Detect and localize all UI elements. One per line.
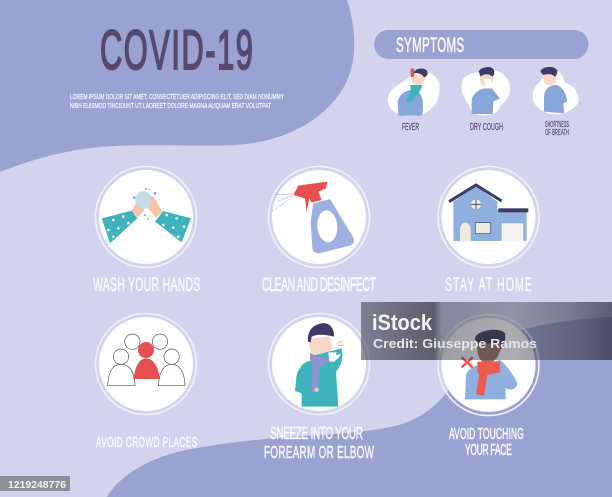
label: clean and desinfect: CLEAN AND DESINFECT — [262, 275, 376, 296]
circle: wash your hands — [96, 166, 196, 268]
circle: clean and desinfect — [268, 166, 370, 268]
icon: house — [449, 185, 528, 242]
label: sneeze into your forearm or elbow: SNEEZE INTO YOUR — [270, 424, 363, 444]
intro text: NIBH EUISMOD TINCIDUNT UT LAOREET DOLORE MAGNA ALIQUAM ERAT VOLUTPAT — [70, 101, 271, 110]
circle: stay at home — [438, 166, 539, 268]
symptom: dry cough — [462, 67, 510, 116]
symptom: shortness of breath — [533, 67, 578, 114]
label: avoid touching your face: AVOID TOUCHING — [449, 425, 524, 443]
text: SHORTNESS — [545, 119, 569, 129]
circle: avoid touching face — [438, 314, 539, 416]
icon: spray bottle — [272, 182, 354, 253]
circle: sneeze — [268, 314, 370, 414]
label: avoid crowd places: AVOID CROWD PLACES — [96, 433, 197, 451]
icon: person touching face — [462, 330, 517, 399]
label: shortness of breath — [545, 119, 569, 137]
text: FEVER — [402, 121, 419, 133]
label: avoid touching your face: YOUR FACE — [465, 441, 512, 459]
label: dry cough: DRY COUGH — [470, 121, 503, 133]
label: shortness of breath: OF BREATH — [545, 127, 569, 137]
watermark: iStock credit: Credit: Giuseppe Ramos — [373, 336, 537, 351]
circle: avoid crowd places — [96, 314, 196, 414]
label: sneeze into your forearm or elbow: FOREARM OR ELBOW — [264, 443, 374, 463]
title: COVID-19 — [100, 18, 253, 81]
label: stay at home: STAY AT HOME — [445, 275, 532, 296]
watermark: iStock credit — [361, 302, 612, 360]
intro text: LOREM IPSUM DOLOR SIT AMET, CONSECTETUER ADIPISCING ELIT, SED DIAM NONUMMY — [70, 92, 284, 101]
symptom: fever — [388, 68, 440, 116]
symptoms header pill: SYMPTOMS — [396, 33, 464, 57]
image id badge — [0, 476, 70, 491]
symptoms header pill — [374, 30, 588, 59]
icon: crowd — [108, 334, 185, 386]
top header blob — [0, 0, 354, 172]
icon: washing hands — [102, 188, 191, 243]
label: sneeze into your forearm or elbow — [264, 424, 374, 463]
watermark: iStock credit: iStock — [372, 310, 433, 335]
image id badge: 1219248776 — [8, 479, 66, 491]
label: avoid touching your face — [449, 425, 524, 459]
intro text — [70, 92, 284, 110]
label: wash your hands: WASH YOUR HANDS — [93, 275, 200, 296]
bottom blob — [107, 317, 612, 497]
icon: sneezing person — [295, 323, 343, 407]
